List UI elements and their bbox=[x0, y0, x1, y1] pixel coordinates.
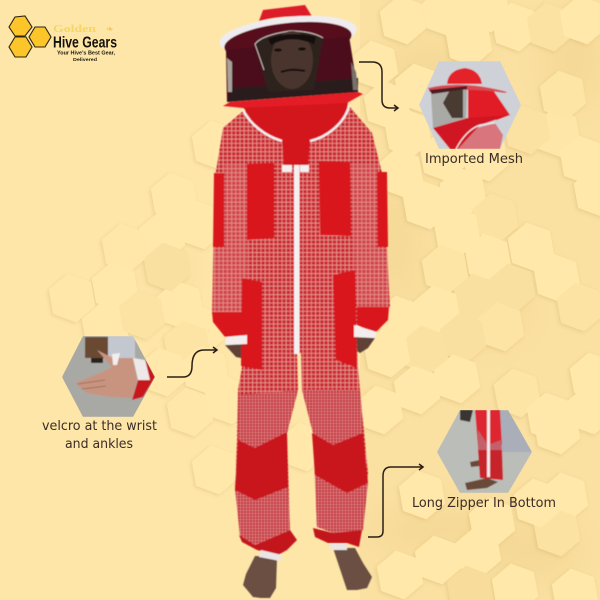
logo: Golden Hive Gears: Delivered bbox=[73, 57, 97, 63]
hat brim and crown bbox=[217, 5, 359, 66]
person wearing bee suit bbox=[212, 5, 390, 598]
leg lower mesh bbox=[235, 390, 368, 545]
feet bbox=[243, 548, 372, 598]
label: imported mesh: Imported Mesh bbox=[425, 151, 523, 167]
arrow: to long zipper bbox=[368, 464, 423, 537]
red reinforcement panels bbox=[213, 161, 388, 370]
logo: Golden Hive Gears: Your Hive's Best Gear, bbox=[57, 50, 116, 56]
arrow: to suit wrist bbox=[167, 347, 217, 377]
collar bbox=[223, 92, 363, 108]
inset: imported mesh photo bbox=[419, 61, 521, 149]
label: long zipper in bottom: Long Zipper In Bottom bbox=[412, 495, 556, 511]
wrist cuffs bbox=[212, 307, 389, 345]
logo: Golden Hive Gears bbox=[9, 16, 117, 63]
white sock bands bbox=[259, 544, 347, 561]
knee patches bbox=[235, 432, 368, 500]
logo: Golden Hive Gears: Golden bbox=[53, 24, 97, 35]
label: velcro at the wrist and ankles: velcro at the wrist bbox=[42, 418, 157, 434]
logo: Golden Hive Gears: ❧ bbox=[106, 25, 114, 35]
logo: Golden Hive Gears: Hive Gears bbox=[53, 34, 117, 52]
ankle cuffs bbox=[239, 528, 362, 555]
hands bbox=[225, 337, 375, 359]
label: velcro at the wrist and ankles bbox=[42, 418, 157, 452]
inset: velcro wrist photo bbox=[62, 336, 155, 417]
label: velcro at the wrist and ankles: and ankles bbox=[65, 436, 133, 452]
veil and face bbox=[226, 31, 358, 102]
sleeves lighter mesh bbox=[212, 165, 389, 312]
zipper bbox=[282, 165, 309, 354]
inset: long zipper photo bbox=[437, 410, 532, 493]
suit body mesh bbox=[212, 107, 390, 540]
arrow: to imported mesh bbox=[359, 62, 398, 111]
hood cape and flap bbox=[243, 100, 349, 165]
